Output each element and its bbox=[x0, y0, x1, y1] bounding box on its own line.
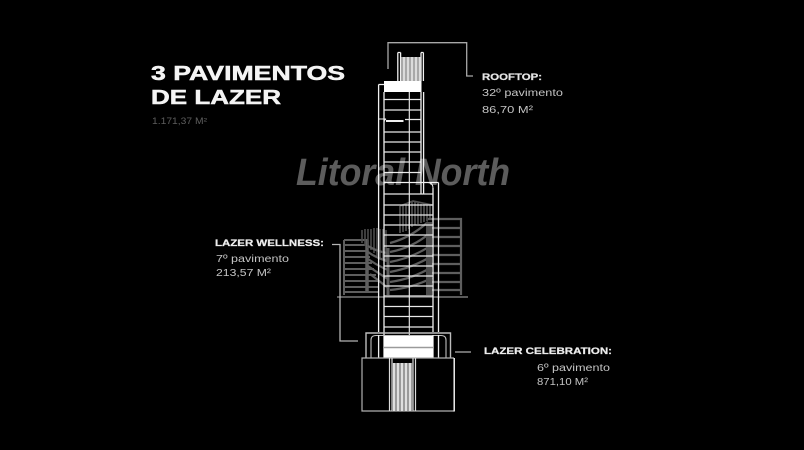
label: lazer wellness: LAZER WELLNESS: bbox=[215, 238, 324, 249]
building: right tall block bbox=[428, 219, 461, 295]
building: central hatched top bbox=[400, 201, 432, 233]
building: centre curved floors bbox=[368, 222, 432, 295]
building: left hatched top bbox=[362, 228, 386, 262]
label: rooftop: 86,70 M² bbox=[482, 105, 534, 116]
label: lazer celebration: 6º pavimento bbox=[537, 363, 611, 374]
label: rooftop: 32º pavimento bbox=[482, 88, 564, 99]
tower elevation drawing bbox=[362, 52, 454, 412]
base block bbox=[362, 358, 454, 412]
faint background buildings illustration bbox=[337, 201, 468, 297]
tower floor lines bbox=[384, 100, 433, 327]
leader line: wellness bbox=[332, 244, 358, 341]
building: left block bbox=[344, 240, 378, 295]
leader line: rooftop bbox=[388, 43, 473, 76]
label: lazer celebration bbox=[484, 346, 612, 388]
label: lazer celebration: LAZER CELEBRATION: bbox=[484, 346, 612, 357]
ground line bbox=[337, 296, 468, 298]
label: lazer wellness: 7º pavimento bbox=[216, 254, 290, 265]
total area: 1.171,37 M² bbox=[152, 116, 207, 126]
label: lazer celebration: 871,10 M² bbox=[537, 377, 589, 388]
title bbox=[151, 63, 345, 109]
label: lazer wellness bbox=[215, 238, 324, 279]
leader line: celebration bbox=[455, 351, 471, 353]
label: rooftop: ROOFTOP: bbox=[482, 72, 542, 83]
podium bbox=[366, 333, 450, 358]
label: rooftop bbox=[482, 72, 564, 116]
watermark: Litoral North bbox=[296, 152, 510, 194]
title: DE LAZER bbox=[151, 87, 282, 109]
title: 3 PAVIMENTOS bbox=[151, 63, 345, 85]
rooftop volume bbox=[384, 52, 423, 92]
tower shaft walls bbox=[379, 84, 438, 358]
label: lazer wellness: 213,57 M² bbox=[216, 268, 272, 279]
